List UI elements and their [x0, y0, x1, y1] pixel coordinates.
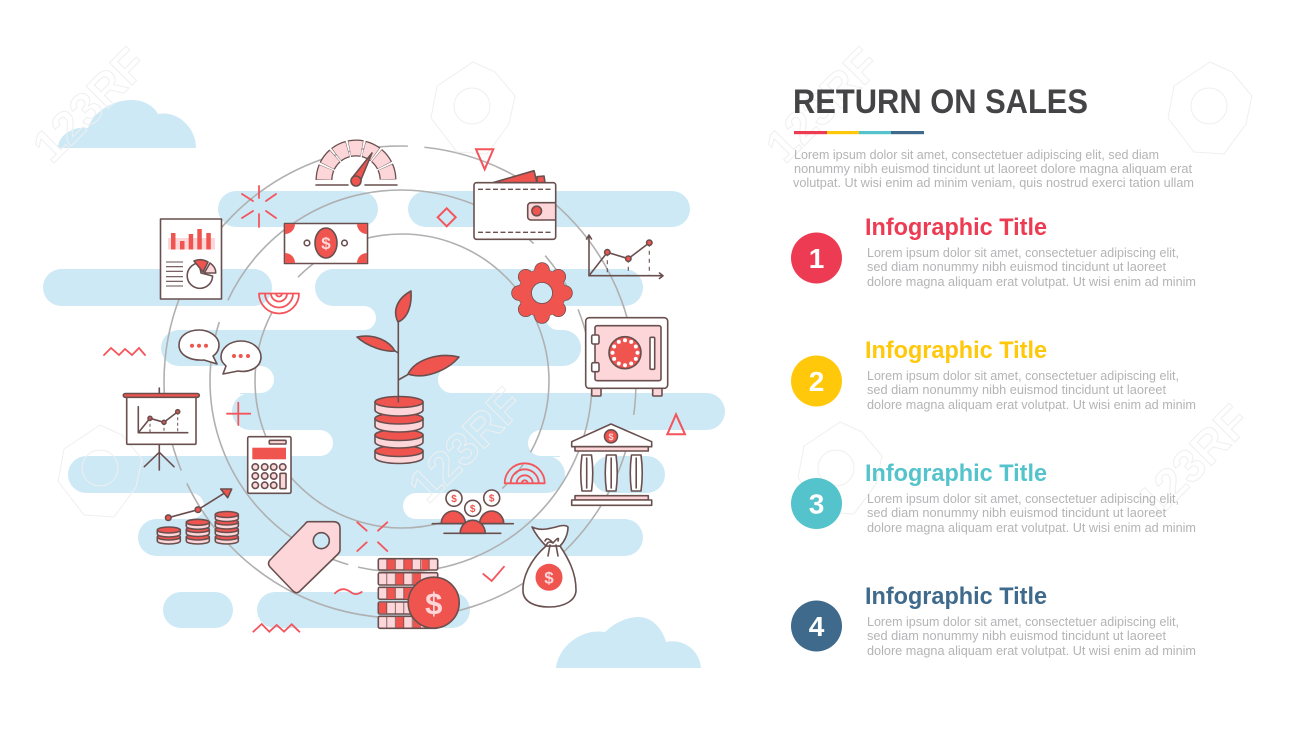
icon: line chart	[586, 235, 663, 278]
icon: people with coins: $	[470, 504, 476, 515]
panel: item 3: Lorem ipsum dolor sit amet, consectetuer adipiscing elit,	[867, 491, 1179, 506]
icon: report	[160, 219, 222, 299]
title underline	[794, 131, 924, 134]
intro text: volutpat. Ut wisi enim ad minim veniam, quis nostrud exerci tation ullam	[793, 175, 1194, 190]
panel: item 1	[791, 214, 1196, 289]
concentric ring arcs	[164, 146, 636, 618]
ornament: diamond	[438, 208, 456, 226]
icon: people with coins: $	[489, 494, 495, 505]
panel: item 2: Lorem ipsum dolor sit amet, consectetuer adipiscing elit,	[867, 368, 1179, 383]
icon: wallet	[474, 171, 556, 239]
panel: item 3	[791, 460, 1196, 535]
icon: bank: $	[608, 432, 614, 442]
icon: safe	[586, 318, 668, 396]
icon: people with coins: $	[451, 494, 457, 505]
central plant on coins	[357, 291, 459, 464]
ornament: burst top left	[242, 186, 276, 227]
icon: brick coin stack	[378, 559, 459, 628]
icon: gauge	[316, 148, 397, 212]
watermark: 123RF	[755, 38, 890, 172]
icon: brick coin stack: $	[425, 586, 442, 621]
icon: bank	[572, 424, 652, 505]
ornament: rainbow	[505, 463, 545, 483]
icon: money bag	[523, 526, 576, 607]
icon: gear	[518, 269, 566, 317]
panel: item 3: 3	[809, 488, 824, 520]
ornament: triangle down	[476, 149, 493, 169]
panel: item 1: Lorem ipsum dolor sit amet, consectetuer adipiscing elit,	[867, 245, 1179, 260]
icon: price tag	[268, 522, 340, 593]
ornament: zigzag	[104, 348, 145, 355]
panel: item 4	[791, 583, 1196, 658]
ornament: plus	[227, 403, 250, 425]
icon: money bag: $	[544, 568, 554, 588]
icon: banknote: $	[321, 234, 331, 253]
watermark	[22, 38, 1260, 529]
panel: item 3: dolore magna aliquam erat volutpat. Ut wisi enim ad minim	[867, 520, 1196, 535]
panel: item 3: Infographic Title	[865, 460, 1047, 487]
panel: item 4: Lorem ipsum dolor sit amet, consectetuer adipiscing elit,	[867, 614, 1179, 629]
intro text	[793, 147, 1194, 190]
panel: item 3: sed diam nonummy nibh euismod tincidunt ut laoreet	[867, 505, 1166, 520]
ornament: half rings	[259, 294, 299, 314]
icon: presentation easel	[123, 388, 199, 470]
intro text: nonummy nibh euismod tincidunt ut laoreet dolore magna aliquam erat	[794, 161, 1192, 176]
panel: item 2	[791, 337, 1196, 412]
panel: item 1: dolore magna aliquam erat volutpat. Ut wisi enim ad minim	[867, 274, 1196, 289]
panel: item 4: Infographic Title	[865, 583, 1047, 610]
ornament: triangle up	[667, 414, 685, 434]
panel: item 2: 2	[809, 366, 824, 397]
panel: item 1: sed diam nonummy nibh euismod tincidunt ut laoreet	[867, 259, 1166, 274]
icon: growing coin stacks	[157, 489, 238, 544]
watermark: 123RF	[1125, 395, 1260, 529]
panel: item 4: 4	[809, 611, 825, 642]
ornament: zigzag bottom	[253, 624, 299, 632]
icon: calculator	[248, 437, 291, 493]
panel: item 2: sed diam nonummy nibh euismod tincidunt ut laoreet	[867, 382, 1166, 397]
ornament: burst bottom	[357, 522, 387, 551]
background shapes	[43, 100, 758, 668]
watermark: 123RF	[398, 378, 533, 512]
icon: people with coins	[432, 490, 513, 533]
panel: item 2: dolore magna aliquam erat volutpat. Ut wisi enim ad minim	[867, 397, 1196, 412]
ornament: tilde	[335, 589, 362, 594]
panel: item 1: Infographic Title	[865, 214, 1047, 241]
ornament: check mark	[483, 567, 504, 581]
title: RETURN ON SALES	[793, 83, 1088, 121]
panel: item 4: sed diam nonummy nibh euismod tincidunt ut laoreet	[867, 628, 1166, 643]
panel: item 2: Infographic Title	[865, 337, 1047, 364]
icon: speech bubbles	[179, 330, 261, 374]
icon: banknote	[284, 224, 368, 264]
watermark: 123RF	[22, 38, 157, 172]
intro text: Lorem ipsum dolor sit amet, consectetuer adipiscing elit, sed diam	[794, 147, 1159, 162]
panel: item 4: dolore magna aliquam erat volutpat. Ut wisi enim ad minim	[867, 643, 1196, 658]
panel: item 1: 1	[809, 243, 824, 274]
